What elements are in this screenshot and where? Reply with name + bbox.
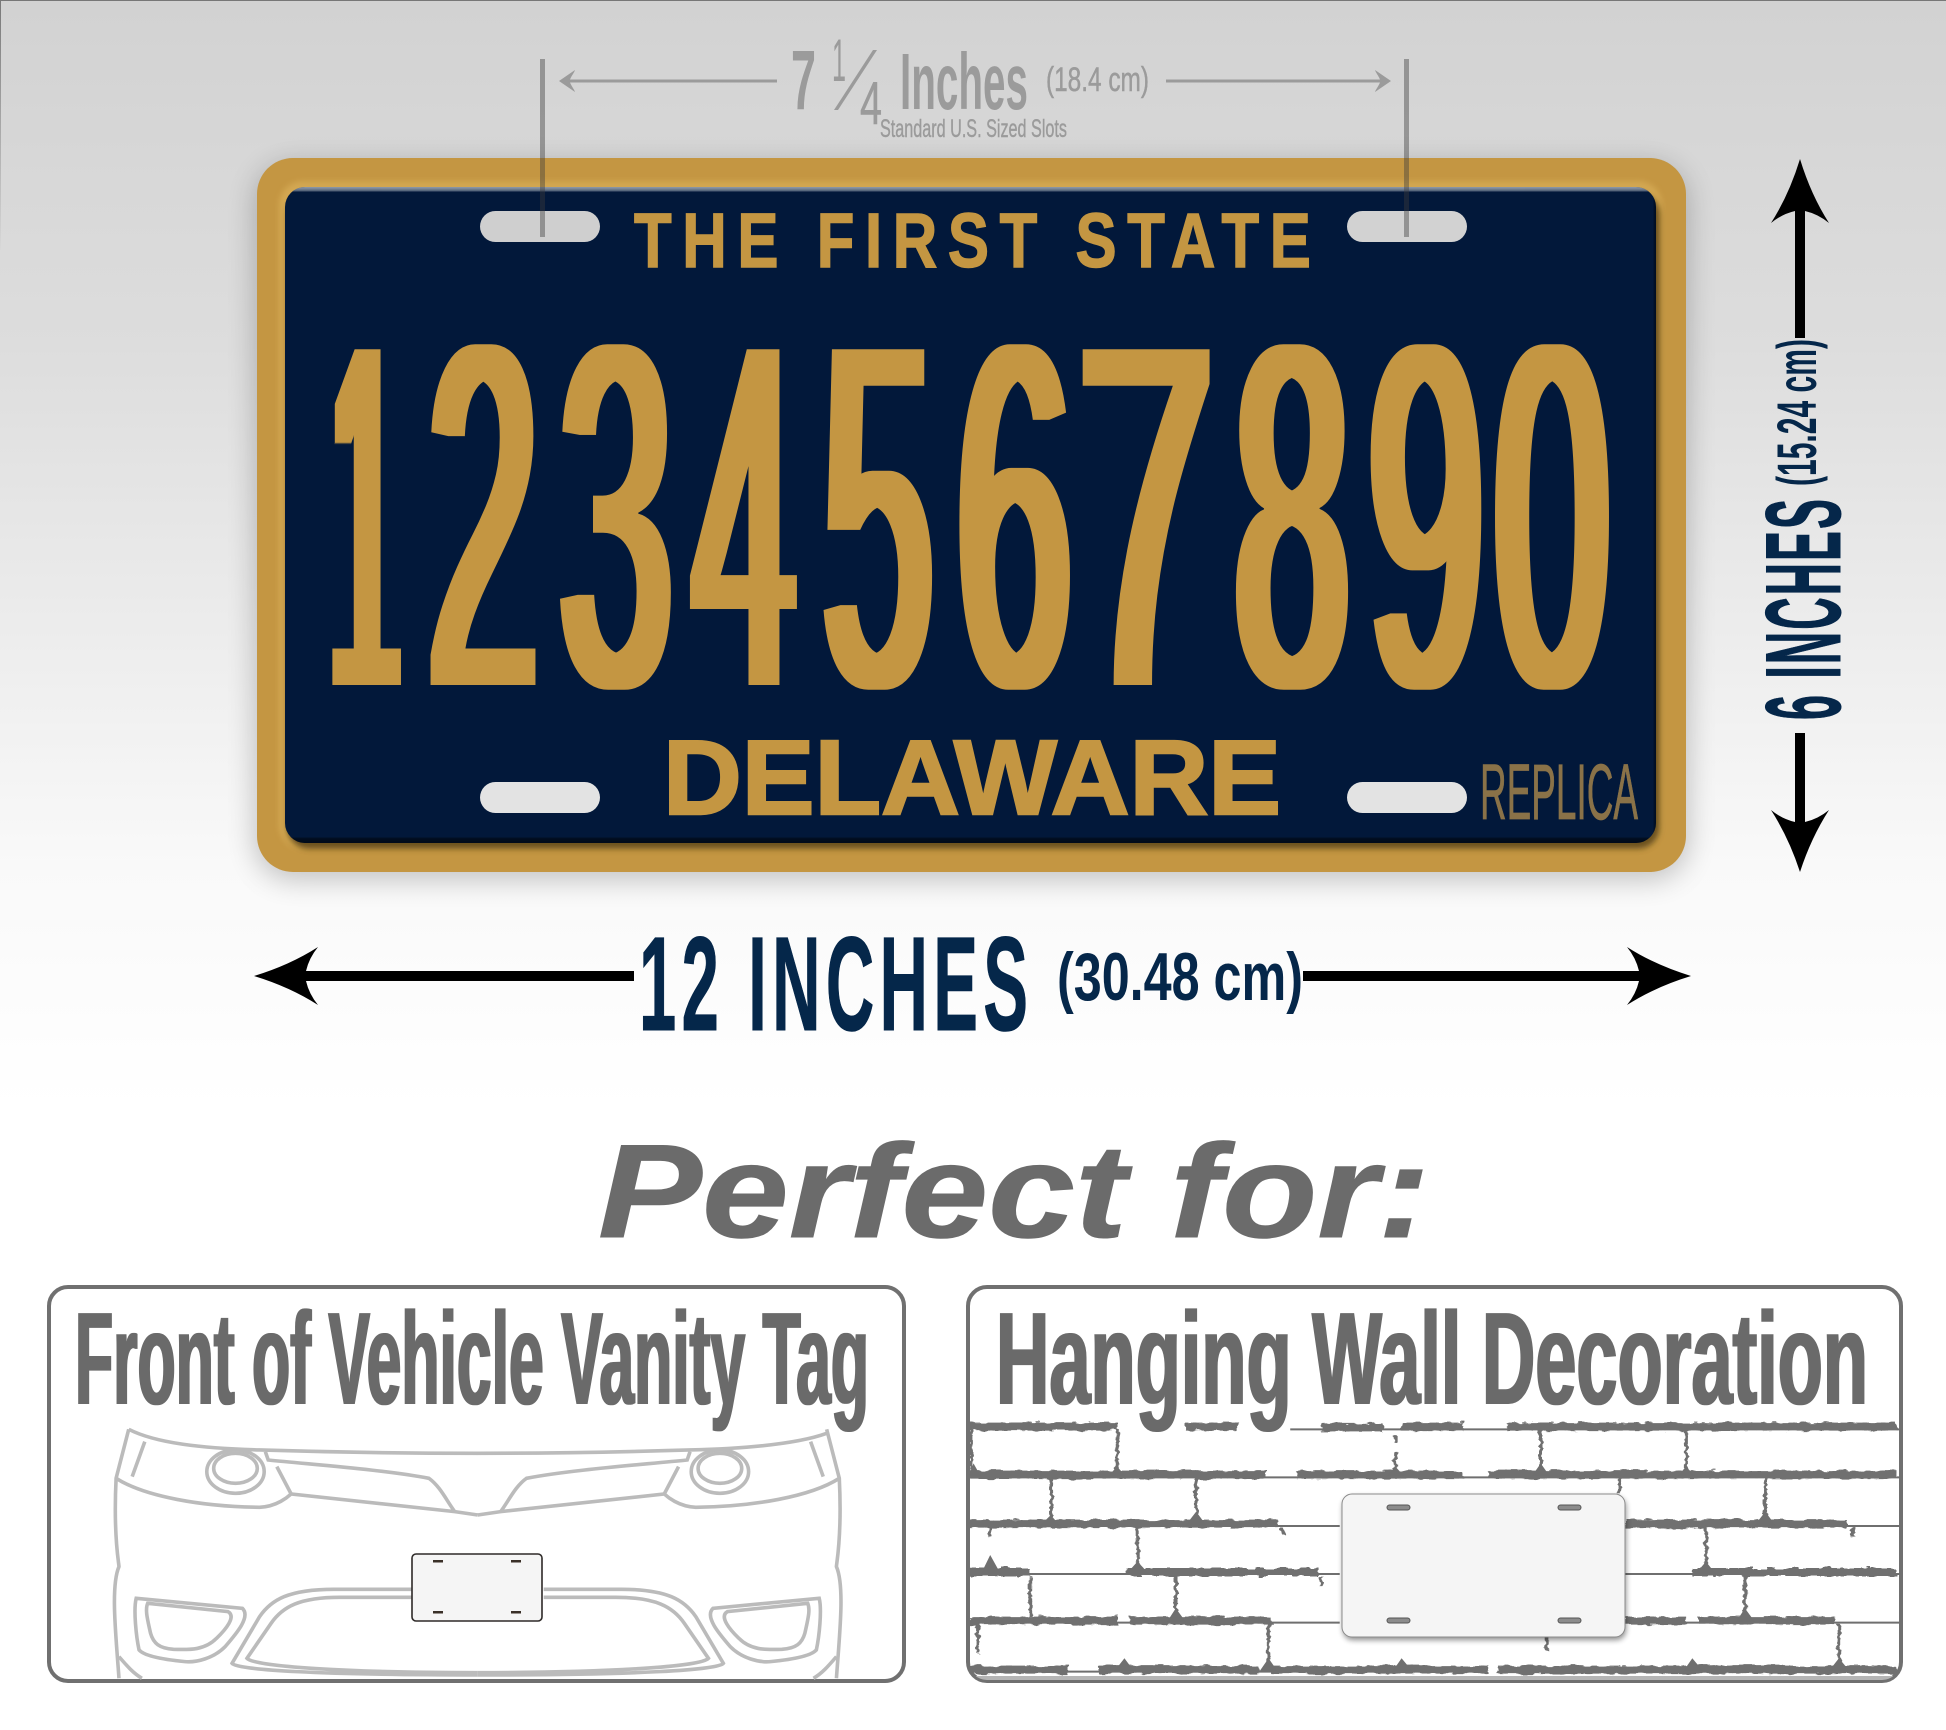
- height label: 6 INCHES: [1745, 499, 1863, 720]
- bottom black arrow: [1771, 733, 1829, 872]
- plate number digits: 6: [957, 244, 1071, 789]
- slot spacing dimension: [540, 27, 1409, 237]
- car outline: [114, 1429, 841, 1678]
- heading: perfect for: Perfect for:: [598, 1118, 1430, 1266]
- height dimension: [1745, 159, 1863, 872]
- height metric label: (15.24 cm): [1765, 339, 1828, 486]
- border bevel: [279, 181, 1662, 849]
- panel frame: [968, 1287, 1901, 1681]
- left guide line: [540, 59, 545, 237]
- field inner shading: [280, 181, 1661, 848]
- small blank plate: [412, 1554, 542, 1621]
- fraction one quarter: 4: [860, 70, 882, 137]
- license plate: REPLICA: [1480, 747, 1638, 836]
- slogan: the first state: THE FIRST STATE: [634, 197, 1311, 284]
- plate number digits: 0: [1495, 244, 1609, 789]
- panel: front of vehicle: [49, 1285, 904, 1681]
- width dimension: [254, 910, 1691, 1059]
- right guide line: [1404, 59, 1409, 237]
- plate gold border: [257, 158, 1686, 872]
- width label: 12 INCHES: [639, 910, 1028, 1059]
- right gray arrow: [1166, 70, 1391, 92]
- text: Front of Vehicle Vanity Tag: [75, 1285, 869, 1432]
- left black arrow: [254, 947, 634, 1005]
- panel frame: [49, 1287, 904, 1681]
- word inches: Inches: [900, 37, 1028, 126]
- panel: hanging wall decoration: [968, 1285, 1903, 1681]
- fraction one quarter: [832, 27, 882, 137]
- plate number digits: 3: [560, 244, 672, 790]
- plate number digits: 4: [694, 243, 794, 788]
- plate number digits: 2: [429, 244, 537, 789]
- plate number digits: 7: [1078, 244, 1214, 789]
- top black arrow: [1771, 159, 1829, 338]
- width metric label: (30.48 cm): [1057, 939, 1303, 1015]
- plate number digits: 9: [1369, 244, 1483, 789]
- plate drop shadow: [255, 164, 1688, 880]
- plate number digits: 1: [331, 245, 399, 789]
- plate number digits: 8: [1235, 244, 1349, 789]
- blank plate on wall: [1342, 1494, 1626, 1640]
- right black arrow: [1303, 947, 1691, 1005]
- plate navy field: [285, 187, 1656, 843]
- plate number digits: 5: [824, 244, 932, 789]
- mortar lines solid: [969, 1429, 1903, 1672]
- left gray arrow: [559, 70, 777, 92]
- whole number 7: 7: [791, 33, 816, 127]
- mounting slots: [480, 211, 1467, 813]
- brick wall: [969, 1427, 1903, 1681]
- fraction one quarter: 1: [832, 27, 846, 94]
- state name: delaware: DELAWARE: [663, 719, 1281, 837]
- license plate: [255, 158, 1688, 880]
- metric label: (18.4 cm): [1046, 61, 1149, 99]
- slot note: Standard U.S. Sized Slots: [880, 115, 1067, 143]
- image edge lines: [0, 0, 1946, 250]
- plate number digits: [331, 243, 1609, 790]
- mortar joints: [969, 1463, 1850, 1672]
